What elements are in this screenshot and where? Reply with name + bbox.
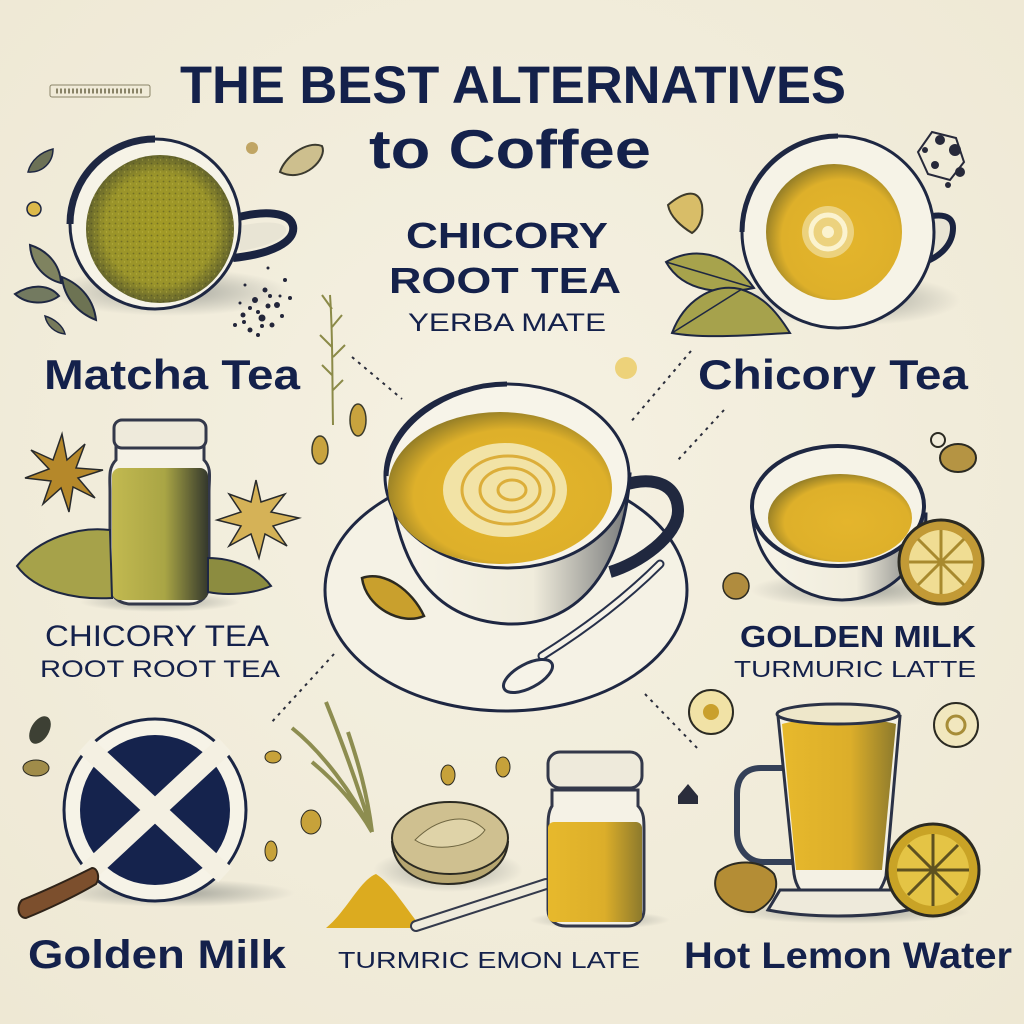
label: turmeric latte: TURMRIC EMON LATE bbox=[338, 947, 640, 973]
bowl: golden milk bbox=[750, 446, 970, 608]
turmeric powder bbox=[326, 874, 422, 928]
herb sprig bbox=[312, 295, 366, 464]
spoon bbox=[499, 564, 660, 699]
label: golden milk right bbox=[734, 619, 977, 682]
no-coffee symbol bbox=[55, 719, 295, 907]
left middle label: CHICORY TEA bbox=[45, 620, 269, 653]
left middle label: ROOT ROOT TEA bbox=[40, 656, 280, 683]
centre heading: CHICORY bbox=[406, 215, 608, 256]
star anise and leaves bbox=[17, 434, 299, 598]
coins bbox=[689, 690, 978, 747]
butter bowl bbox=[373, 802, 523, 892]
wooden spoon bbox=[416, 884, 546, 926]
label: golden milk bottom: Golden Milk bbox=[28, 933, 287, 977]
floating nuts bbox=[265, 751, 510, 861]
cinnamon stick bbox=[19, 868, 98, 918]
speckle cluster bbox=[233, 266, 292, 337]
glass mug: lemon water bbox=[730, 704, 970, 924]
house mark bbox=[678, 784, 698, 804]
small pearl bbox=[615, 357, 637, 379]
jar: turmeric bbox=[530, 752, 670, 929]
title: THE BEST ALTERNATIVES bbox=[180, 56, 846, 115]
matcha cup bbox=[50, 139, 293, 316]
walnut and specks right bbox=[723, 433, 976, 599]
title bbox=[180, 56, 846, 180]
label: chicory tea: Chicory Tea bbox=[698, 351, 969, 398]
centre heading: YERBA MATE bbox=[408, 309, 606, 337]
left middle label bbox=[40, 620, 280, 683]
lemon slice: mug bbox=[887, 824, 979, 916]
pointer lines bbox=[270, 351, 724, 750]
centre heading: ROOT TEA bbox=[389, 260, 621, 301]
small seeds left bbox=[23, 713, 55, 776]
walnut bbox=[715, 862, 776, 912]
lemon slice: bowl bbox=[899, 520, 983, 604]
main cup bbox=[385, 384, 678, 624]
label: golden milk right: GOLDEN MILK bbox=[740, 619, 977, 654]
main saucer bbox=[325, 469, 687, 711]
ornament: title left bbox=[50, 85, 150, 97]
label: hot lemon water: Hot Lemon Water bbox=[684, 935, 1012, 976]
lemongrass bbox=[292, 702, 372, 832]
centre heading bbox=[389, 215, 621, 337]
label: matcha tea: Matcha Tea bbox=[44, 351, 301, 398]
jar: green tea bbox=[80, 420, 240, 612]
chicory leaves bbox=[666, 194, 790, 336]
chicory cup bbox=[740, 136, 960, 328]
cardamom pod bbox=[362, 576, 424, 619]
matcha leaves bbox=[15, 142, 323, 334]
title: to Coffee bbox=[369, 118, 651, 180]
ornament: cluster top right bbox=[918, 132, 965, 188]
label: golden milk right: TURMURIC LATTE bbox=[734, 656, 976, 682]
